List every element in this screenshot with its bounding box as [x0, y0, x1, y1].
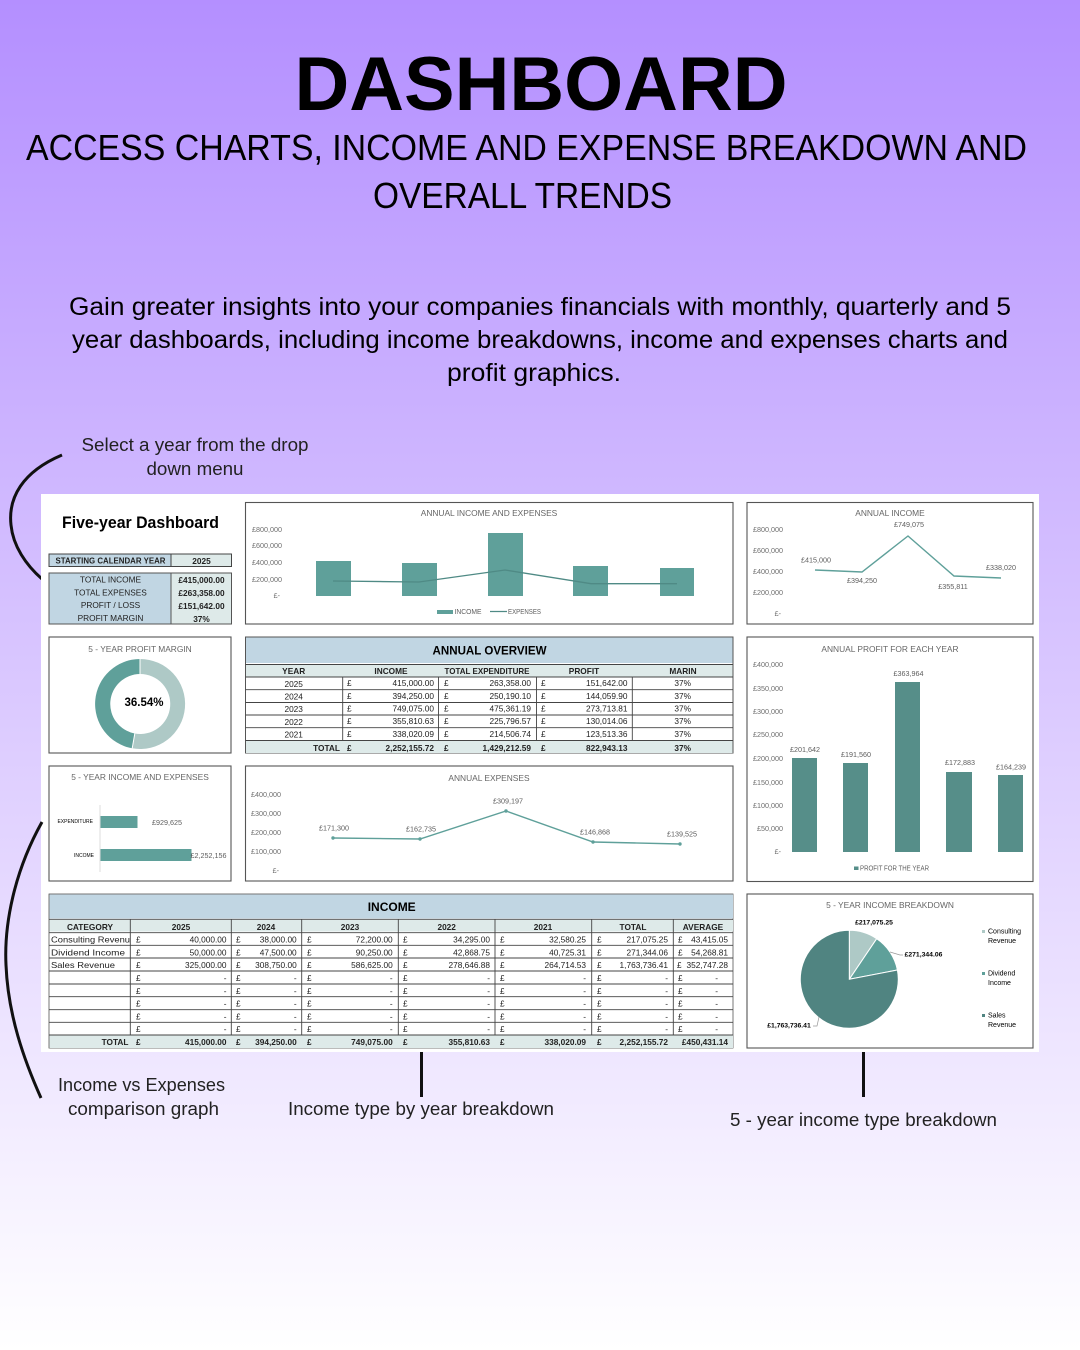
panel: income table: - [715, 1024, 718, 1034]
panel: 5-year profit margin donut: 36.54% [124, 697, 164, 709]
panel: income table: INCOME [368, 900, 416, 914]
panel: income table: 271,344.06 [626, 948, 668, 958]
panel: income table: £ [403, 934, 408, 944]
panel: income table: - [390, 998, 393, 1008]
panel: income table: £ [236, 986, 241, 996]
panel: income table: 2025 [172, 922, 191, 932]
panel: 5-year profit margin donut: 5 - YEAR PROFIT MARGIN [88, 644, 192, 654]
panel: annual overview table: £ [444, 716, 449, 726]
panel: annual income chart: £800,000 [753, 525, 783, 534]
panel: income table: - [294, 998, 297, 1008]
panel: income table: £ [597, 948, 602, 958]
panel: income table [49, 894, 733, 1048]
panel: income table: - [487, 973, 490, 983]
panel: income table: £ [677, 960, 682, 970]
panel: income table: - [487, 1024, 490, 1034]
panel: annual overview table: 2024 [284, 692, 303, 702]
panel: income table: 278,646.88 [448, 960, 490, 970]
panel: yearly summary: PROFIT MARGIN [78, 613, 143, 623]
dashboard screenshot [41, 494, 1039, 1052]
panel: income table: £ [236, 960, 241, 970]
panel: income table: 54,268.81 [691, 948, 728, 958]
panel: annual income and expenses chart: ANNUAL INCOME AND EXPENSES [421, 508, 558, 518]
panel: income table: - [294, 986, 297, 996]
panel: income table: £ [236, 934, 241, 944]
panel: income table: £ [500, 948, 505, 958]
arrow: curve to year selector [11, 455, 62, 579]
panel: annual overview table: £ [541, 729, 546, 739]
panel: income table: £ [403, 960, 408, 970]
panel: annual overview table: 123,513.36 [586, 729, 628, 739]
panel: income table: £ [136, 1024, 141, 1034]
panel: income table: - [583, 998, 586, 1008]
panel: income table: £ [678, 1012, 683, 1022]
panel: annual income chart: £749,075 [894, 520, 924, 529]
panel: yearly summary: 37% [193, 614, 210, 624]
panel: income table: £ [597, 1012, 602, 1022]
panel: annual income chart: £355,811 [938, 582, 968, 591]
panel: annual expenses line chart: £171,300 [319, 824, 349, 832]
panel: income table: 264,714.53 [544, 960, 586, 970]
panel: annual overview table: PROFIT [569, 666, 599, 676]
panel: income table: 217,075.25 [626, 934, 668, 944]
panel: annual income and expenses chart: £400,000 [252, 558, 282, 567]
annotation: select a year: Select a year from the drop [82, 435, 308, 455]
panel: income table: £ [500, 1024, 505, 1034]
panel: 5-year income and expenses bars [49, 766, 231, 881]
panel: yearly summary [49, 573, 232, 624]
panel: income table: 32,580.25 [549, 934, 586, 944]
panel: annual overview table: £ [444, 743, 449, 753]
panel: annual overview table: £ [347, 716, 352, 726]
panel: income table: £ [136, 998, 141, 1008]
panel: income table: 394,250.00 [255, 1037, 297, 1047]
panel: income table: AVERAGE [683, 922, 724, 932]
panel: annual profit bar chart: £100,000 [753, 801, 783, 810]
panel: income table: - [294, 1024, 297, 1034]
panel: annual overview table: 37% [674, 691, 692, 701]
panel: income table: £ [597, 986, 602, 996]
annotation: 5-year income type: 5 - year income type breakdown [730, 1110, 997, 1130]
annotation: income vs expenses: Income vs Expenses [58, 1075, 225, 1095]
panel: income table: 308,750.00 [255, 960, 297, 970]
panel: yearly summary: PROFIT / LOSS [81, 600, 141, 610]
panel: annual overview table: MARIN [669, 666, 697, 676]
panel: annual income chart [747, 502, 1033, 624]
panel: annual overview table: £ [347, 678, 352, 688]
panel: income table: £ [403, 986, 408, 996]
annotation: income vs expenses: comparison graph [68, 1099, 219, 1119]
panel: annual overview table: 225,796.57 [489, 716, 531, 726]
panel: annual overview table: 2022 [284, 717, 303, 727]
panel: income table: Consulting Revenu [51, 934, 130, 944]
panel: income table: CATEGORY [67, 922, 114, 932]
panel: annual expenses line chart: £162,735 [406, 824, 436, 834]
panel: annual income chart: £400,000 [753, 567, 783, 576]
panel: 5-year income breakdown pie: £271,344.06 [905, 952, 943, 958]
panel: income table: - [715, 1012, 718, 1022]
panel: income table: 72,200.00 [356, 934, 393, 944]
panel: annual profit bar chart: £164,239 [996, 762, 1026, 772]
panel: yearly summary: £151,642.00 [178, 601, 225, 611]
panel: annual income chart: £- [775, 609, 782, 618]
intro paragraph: profit graphics. [447, 359, 621, 387]
panel: annual profit bar chart: £350,000 [753, 684, 783, 693]
panel: annual profit bar chart: £- [775, 847, 782, 856]
panel: annual overview table: 1,429,212.59 [483, 743, 531, 753]
panel: annual overview table: 2,252,155.72 [386, 743, 434, 753]
panel: income table: - [665, 1012, 668, 1022]
panel: annual overview table: 2023 [284, 704, 303, 714]
panel: 5-year income and expenses bars: £929,625 [152, 818, 182, 827]
panel: income table: - [487, 986, 490, 996]
panel: income table: - [390, 973, 393, 983]
panel: income table: £ [236, 973, 241, 983]
panel: yearly summary: £415,000.00 [178, 575, 225, 585]
panel: income table: 43,415.05 [691, 934, 728, 944]
panel: annual expenses line chart: £309,197 [493, 796, 523, 806]
panel: income table: £ [597, 1037, 602, 1047]
panel: 5-year income and expenses bars: EXPENDITURE [57, 819, 94, 825]
panel: annual overview table: £ [541, 743, 546, 753]
panel: yearly summary: £263,358.00 [178, 588, 225, 598]
panel: annual income and expenses chart: £600,000 [252, 541, 282, 550]
panel: income table: £ [678, 934, 683, 944]
panel: income table: £ [678, 986, 683, 996]
panel: income table: £ [500, 960, 505, 970]
panel: income table: 355,810.63 [448, 1037, 490, 1047]
panel: annual overview table: INCOME [374, 666, 408, 676]
panel: income table: - [224, 973, 227, 983]
panel: income table: £ [403, 973, 408, 983]
arrow: line to income pie [862, 1052, 865, 1097]
panel: income table: £ [500, 998, 505, 1008]
panel: annual overview table: 37% [674, 716, 692, 726]
panel: income table: £ [403, 948, 408, 958]
panel: income table: - [715, 986, 718, 996]
panel: 5-year income breakdown pie: Income [988, 980, 1011, 987]
panel: income table: £ [678, 948, 683, 958]
panel: income table: 1,763,736.41 [620, 960, 668, 970]
panel: income table: 2023 [341, 922, 360, 932]
panel: annual expenses line chart: £200,000 [251, 828, 281, 837]
panel: 5-year profit margin donut [49, 637, 231, 753]
panel: annual profit bar chart: ANNUAL PROFIT FOR EACH YEAR [821, 644, 959, 654]
panel: 5-year income and expenses bars: 5 - YEAR INCOME AND EXPENSES [71, 772, 209, 782]
panel: income table: £ [136, 960, 141, 970]
panel: income table: 352,747.28 [686, 960, 728, 970]
panel: income table: £ [307, 986, 312, 996]
panel: annual overview table: £ [444, 704, 449, 714]
panel: annual overview table: 214,506.74 [489, 729, 531, 739]
panel: 5-year income and expenses bars: INCOME [74, 853, 95, 859]
panel: annual overview table: 130,014.06 [586, 716, 628, 726]
panel: annual overview table: £ [347, 729, 352, 739]
panel: income table: £ [500, 1012, 505, 1022]
panel: income table: TOTAL [620, 922, 646, 932]
panel: income table: - [487, 998, 490, 1008]
arrow: line to income table [420, 1052, 423, 1097]
panel: annual profit bar chart [747, 637, 1033, 882]
panel: income table: £ [236, 948, 241, 958]
panel: income table: £ [136, 1012, 141, 1022]
panel: annual overview table: 151,642.00 [586, 678, 628, 688]
panel: annual overview table: 475,361.19 [489, 704, 531, 714]
panel: income table: - [715, 998, 718, 1008]
panel: annual profit bar chart: £150,000 [753, 778, 783, 787]
panel: annual income and expenses chart: £800,000 [252, 525, 282, 534]
panel: income table: £ [500, 934, 505, 944]
panel: annual overview table: 822,943.13 [586, 743, 628, 753]
panel: annual income chart: £600,000 [753, 546, 783, 555]
intro paragraph: year dashboards, including income breakdowns, income and expenses charts and [72, 326, 1008, 354]
panel: annual overview table: £ [541, 691, 546, 701]
panel: yearly summary: TOTAL INCOME [80, 574, 142, 584]
panel: annual income chart: ANNUAL INCOME [855, 508, 925, 518]
panel: income table: £ [307, 998, 312, 1008]
panel: income table: 40,725.31 [549, 948, 586, 958]
panel: 5-year income breakdown pie [747, 894, 1033, 1048]
annotation: select a year [82, 435, 308, 479]
panel: annual overview table: £ [444, 678, 449, 688]
panel: annual overview table: 250,190.10 [489, 691, 531, 701]
panel: annual profit bar chart: £172,883 [945, 758, 975, 767]
panel: income table: - [390, 986, 393, 996]
panel: income table: 586,625.00 [351, 960, 393, 970]
panel: annual profit bar chart: £300,000 [753, 707, 783, 716]
annotation: income vs expenses [58, 1075, 225, 1119]
panel: annual expenses line chart: ANNUAL EXPENSES [448, 773, 530, 783]
panel: annual expenses line chart: £100,000 [251, 847, 281, 856]
panel: income table: - [390, 1024, 393, 1034]
panel: income table: £ [136, 986, 141, 996]
panel: annual overview table: £ [541, 704, 546, 714]
panel: annual overview table: 37% [674, 704, 692, 714]
panel: income table: - [583, 973, 586, 983]
panel: income table: - [583, 986, 586, 996]
panel: income table: £ [307, 1037, 312, 1047]
panel: income table: 47,500.00 [260, 948, 297, 958]
intro paragraph: Gain greater insights into your companies financials with monthly, quarterly and 5 [69, 293, 1011, 321]
panel: annual overview table: TOTAL EXPENDITURE [444, 666, 530, 676]
panel: income table: £ [307, 934, 312, 944]
panel: starting calendar year: 2025 [192, 556, 211, 566]
panel: annual overview table: £ [541, 716, 546, 726]
panel: income table: £ [236, 998, 241, 1008]
panel: annual overview table: 2025 [284, 679, 303, 689]
panel: income table: - [487, 1012, 490, 1022]
panel: 5-year income breakdown pie: Sales [988, 1012, 1006, 1020]
panel: annual overview table: TOTAL [313, 743, 340, 753]
panel: income table: £ [500, 986, 505, 996]
panel: income table: £ [307, 973, 312, 983]
panel: starting calendar year [49, 554, 232, 566]
panel: income table: 415,000.00 [185, 1037, 227, 1047]
panel: income table: 325,000.00 [185, 960, 227, 970]
panel: income table: TOTAL [102, 1037, 128, 1047]
panel: annual overview table: 338,020.09 [392, 729, 434, 739]
panel: income table: - [224, 1024, 227, 1034]
panel: annual overview table: 144,059.90 [586, 691, 628, 701]
panel: income table: £ [597, 934, 602, 944]
panel: 5-year income breakdown pie: Revenue [988, 1022, 1016, 1029]
panel: annual expenses line chart: £139,525 [667, 830, 697, 838]
panel: annual overview table: 415,000.00 [392, 678, 434, 688]
panel: income table: - [665, 1024, 668, 1034]
panel: annual income and expenses chart: £200,000 [252, 575, 282, 584]
title: DASHBOARD [294, 42, 788, 127]
panel: income table: £ [678, 998, 683, 1008]
panel: income table: - [390, 1012, 393, 1022]
panel: income table: - [294, 973, 297, 983]
panel: income table: 50,000.00 [190, 948, 227, 958]
panel: annual profit bar chart: £50,000 [757, 824, 783, 833]
panel: annual overview table: ANNUAL OVERVIEW [432, 644, 547, 658]
panel: income table: 40,000.00 [190, 934, 227, 944]
panel: annual overview table: 263,358.00 [489, 678, 531, 688]
panel: income table: £ [678, 1024, 683, 1034]
panel: annual overview table: 37% [674, 729, 692, 739]
subtitle [26, 127, 1027, 216]
panel: income table: £ [136, 948, 141, 958]
intro paragraph [69, 293, 1011, 387]
panel: income table: £ [678, 973, 683, 983]
panel: income table: £ [403, 1012, 408, 1022]
panel: income table: £ [597, 1024, 602, 1034]
panel: annual overview table: £ [444, 691, 449, 701]
panel: income table: £ [597, 973, 602, 983]
panel: 5-year income breakdown pie: Revenue [988, 938, 1016, 945]
panel: income table: £ [236, 1012, 241, 1022]
panel: income table: £ [500, 973, 505, 983]
panel: income table: - [715, 973, 718, 983]
panel: income table: 90,250.00 [356, 948, 393, 958]
panel: 5-year income breakdown pie: 5 - YEAR INCOME BREAKDOWN [826, 900, 954, 910]
panel: annual overview table: 2021 [284, 730, 303, 740]
panel: annual expenses line chart [246, 766, 733, 881]
panel: income table: £ [403, 1037, 408, 1047]
panel: annual income chart: £394,250 [847, 576, 877, 585]
panel: annual overview table: 37% [674, 678, 692, 688]
panel: income table: - [583, 1012, 586, 1022]
panel: income table: - [224, 998, 227, 1008]
panel: income table: £ [597, 998, 602, 1008]
panel: income table: Sales Revenue [51, 960, 115, 970]
panel: income table: 34,295.00 [453, 934, 490, 944]
panel: income table: £ [136, 934, 141, 944]
panel: annual income and expenses chart [246, 502, 733, 624]
panel: income table: 42,868.75 [453, 948, 490, 958]
panel: annual profit bar chart: £363,964 [894, 669, 923, 678]
panel: annual overview table: £ [444, 729, 449, 739]
panel: income table: 2021 [534, 922, 553, 932]
panel: annual overview table: 394,250.00 [392, 691, 434, 701]
panel: income table: £ [597, 960, 602, 970]
panel: income table: - [224, 1012, 227, 1022]
panel: annual expenses line chart: £146,868 [580, 828, 610, 836]
panel: income table: - [665, 973, 668, 983]
panel: annual profit bar chart: PROFIT FOR THE YEAR [860, 866, 929, 872]
panel: income table: £ [307, 948, 312, 958]
panel: income table: £ [307, 1012, 312, 1022]
annotation: select a year: down menu [146, 459, 244, 479]
panel: income table: - [665, 998, 668, 1008]
panel: annual overview table: £ [347, 743, 352, 753]
panel: annual overview table: YEAR [282, 666, 305, 676]
panel: annual overview table [246, 637, 733, 753]
panel: income table: - [224, 986, 227, 996]
panel: income table: - [665, 986, 668, 996]
panel: annual profit bar chart: £200,000 [753, 754, 783, 763]
panel: income table: Dividend Income [51, 948, 125, 958]
panel: annual income chart: £200,000 [753, 588, 783, 597]
panel: income table: 2024 [257, 922, 276, 932]
panel: annual income and expenses chart: INCOME [454, 609, 482, 616]
panel: annual expenses line chart: £400,000 [251, 790, 281, 799]
panel: annual overview table: 273,713.81 [586, 704, 628, 714]
panel: annual expenses line chart: £- [273, 866, 280, 875]
dashboard heading: Five-year Dashboard [62, 513, 219, 532]
annotation: income type by year: Income type by year breakdown [288, 1099, 554, 1119]
panel: income table: - [294, 1012, 297, 1022]
panel: income table: 749,075.00 [351, 1037, 393, 1047]
panel: income table: 2022 [437, 922, 456, 932]
panel: income table: £450,431.14 [682, 1037, 728, 1047]
panel: annual profit bar chart: £250,000 [753, 730, 783, 739]
panel: income table: £ [136, 1037, 141, 1047]
panel: annual expenses line chart: £300,000 [251, 809, 281, 818]
panel: income table: 338,020.09 [544, 1037, 586, 1047]
panel: starting calendar year: STARTING CALENDAR YEAR [56, 556, 166, 566]
panel: annual overview table: 749,075.00 [392, 704, 434, 714]
panel: income table: 2,252,155.72 [620, 1037, 668, 1047]
panel: annual income chart: £415,000 [801, 556, 831, 564]
panel: annual overview table: 355,810.63 [392, 716, 434, 726]
panel: annual income chart: £338,020 [986, 563, 1016, 572]
panel: income table: £ [403, 1024, 408, 1034]
panel: 5-year income breakdown pie: £1,763,736.41 [767, 1022, 811, 1030]
panel: income table: £ [307, 960, 312, 970]
panel: annual overview table: £ [541, 678, 546, 688]
panel: income table: £ [403, 998, 408, 1008]
panel: 5-year income breakdown pie: Consulting [988, 928, 1021, 936]
panel: annual overview table: 37% [674, 743, 692, 753]
arrow: curve to income vs expenses chart [6, 822, 42, 1098]
panel: income table: £ [307, 1024, 312, 1034]
panel: income table: £ [236, 1024, 241, 1034]
panel: 5-year income and expenses bars: £2,252,156 [191, 851, 226, 860]
panel: annual profit bar chart: £400,000 [753, 660, 783, 669]
subtitle: ACCESS CHARTS, INCOME AND EXPENSE BREAKDOWN AND [26, 127, 1027, 168]
panel: annual profit bar chart: £191,560 [841, 750, 871, 759]
panel: annual overview table: £ [347, 691, 352, 701]
panel: 5-year income breakdown pie: £217,075.25 [855, 920, 893, 926]
panel: income table: 38,000.00 [260, 934, 297, 944]
panel: income table: - [583, 1024, 586, 1034]
panel: income table: £ [136, 973, 141, 983]
panel: annual income and expenses chart: EXPENSES [508, 609, 541, 616]
panel: 5-year income breakdown pie: Dividend [988, 970, 1015, 978]
panel: yearly summary: TOTAL EXPENSES [74, 588, 147, 598]
panel: annual income and expenses chart: £- [274, 591, 281, 600]
panel: annual overview table: £ [347, 704, 352, 714]
subtitle: OVERALL TRENDS [373, 175, 672, 216]
panel: income table: £ [500, 1037, 505, 1047]
panel: income table: £ [236, 1037, 241, 1047]
panel: annual profit bar chart: £201,642 [790, 745, 820, 754]
